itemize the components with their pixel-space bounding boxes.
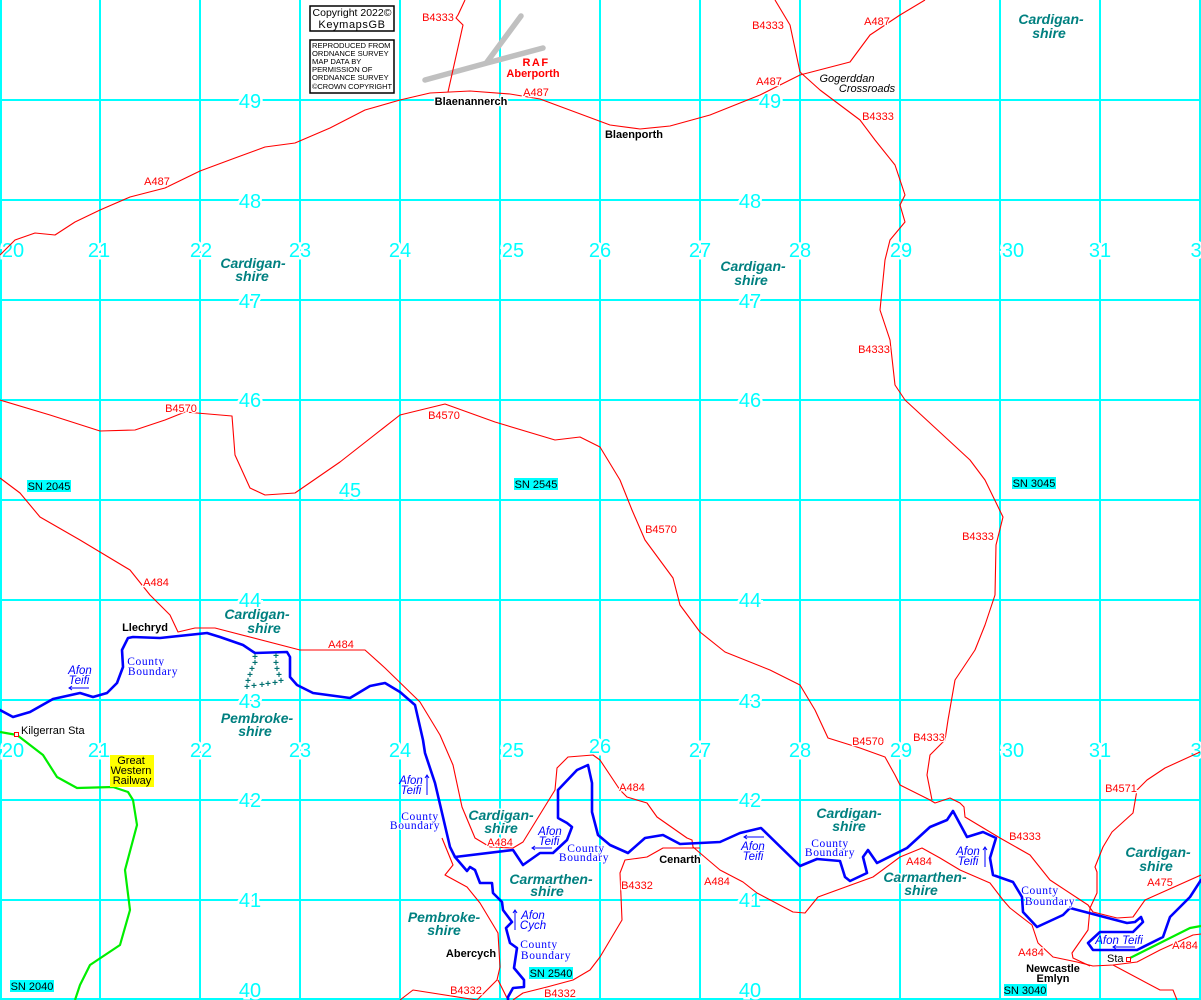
grid numbers: 20 (2, 740, 24, 762)
county names: shire (238, 723, 272, 739)
road labels: A484 (619, 782, 645, 794)
grid numbers: 42 (739, 790, 761, 812)
grid numbers: 21 (88, 240, 110, 262)
county names: shire (235, 268, 269, 284)
county boundary river (0, 633, 1201, 1000)
plantation crosses: + (247, 671, 253, 682)
road labels: B4332 (621, 880, 653, 892)
grid numbers: 29 (890, 740, 912, 762)
river labels: Cych (520, 920, 546, 932)
reproduction notice box: ©CROWN COPYRIGHT (312, 82, 392, 91)
river labels: Afon (740, 841, 765, 853)
reproduction notice box: ORDNANCE SURVEY (312, 49, 389, 58)
road labels: B4333 (752, 20, 784, 32)
county boundary labels: County (811, 838, 849, 850)
road labels: A484 (1018, 947, 1044, 959)
grid numbers: 29 (890, 240, 912, 262)
settlement labels: Blaenannerch (435, 96, 508, 108)
plantation crosses: + (249, 665, 255, 676)
grid reference labels: SN 2040 (11, 981, 53, 993)
railway label (110, 755, 154, 787)
copyright box: KeymapsGB (318, 19, 386, 31)
grid numbers: 22 (190, 240, 212, 262)
county names: shire (1032, 25, 1066, 41)
river labels: Afon (520, 910, 545, 922)
grid numbers: 44 (739, 590, 761, 612)
plantation crosses: + (276, 671, 282, 682)
grid numbers: 43 (239, 691, 261, 713)
plantation crosses: + (265, 680, 271, 691)
reproduction notice box: ORDNANCE SURVEY (312, 73, 389, 82)
grid numbers: 49 (239, 91, 261, 113)
road labels: B4332 (544, 988, 576, 1000)
grid numbers: 30 (1002, 240, 1024, 262)
grid numbers: 45 (339, 480, 361, 502)
reproduction notice box: MAP DATA BY (312, 57, 361, 66)
grid reference labels: SN 2540 (530, 968, 572, 980)
county boundary labels: County (127, 656, 165, 668)
RAF Aberporth label: Aberporth (506, 68, 560, 80)
grid numbers: 49 (759, 91, 781, 113)
grid numbers: 48 (239, 191, 261, 213)
county names: Pembroke- (408, 909, 481, 925)
county names: Pembroke- (221, 710, 294, 726)
grid numbers: 27 (689, 740, 711, 762)
river labels: Teifi (958, 856, 979, 868)
county names: Cardigan- (220, 255, 286, 271)
settlement labels: Cenarth (659, 854, 701, 866)
railway label: Railway (113, 775, 152, 787)
road labels: B4570 (645, 524, 677, 536)
county names: shire (904, 882, 938, 898)
grid numbers: 26 (589, 240, 611, 262)
grid numbers: 42 (239, 790, 261, 812)
grid numbers: 47 (239, 291, 261, 313)
road labels: A484 (143, 577, 169, 589)
county names: Carmarthen- (883, 869, 967, 885)
reproduction notice box (310, 40, 394, 93)
road labels: B4333 (962, 531, 994, 543)
plantation crosses: + (245, 677, 251, 688)
county names: Cardigan- (224, 606, 290, 622)
crossroads label: Crossroads (839, 83, 896, 95)
grid numbers: 27 (689, 240, 711, 262)
plantation crosses: + (272, 679, 278, 690)
crossroads label (819, 73, 896, 95)
settlement labels (122, 96, 1080, 985)
river labels: Afon (955, 846, 980, 858)
road labels: A487 (523, 87, 549, 99)
grid numbers: 21 (88, 740, 110, 762)
road labels: A487 (144, 176, 170, 188)
grid numbers: 30 (1002, 740, 1024, 762)
settlement labels: Emlyn (1036, 973, 1070, 985)
county names: Cardigan- (1125, 844, 1191, 860)
copyright box (310, 6, 394, 31)
road labels: B4570 (165, 403, 197, 415)
county names: Cardigan- (816, 805, 882, 821)
plantation crosses (244, 652, 284, 694)
grid numbers: 43 (739, 691, 761, 713)
RAF Aberporth label: RAF (522, 57, 550, 69)
river labels: Teifi (69, 675, 90, 687)
road labels: A487 (864, 16, 890, 28)
grid numbers: 47 (739, 291, 761, 313)
county names (220, 11, 1191, 938)
road labels: A484 (487, 837, 513, 849)
river labels: Afon (67, 665, 92, 677)
grid numbers: 31 (1089, 740, 1111, 762)
settlement labels: Newcastle (1026, 963, 1080, 975)
river labels (67, 665, 1143, 949)
road labels: B4333 (913, 732, 945, 744)
county boundary labels: Boundary (128, 666, 178, 678)
road labels: A484 (704, 876, 730, 888)
plantation crosses: + (244, 683, 250, 694)
grid numbers: 31 (1089, 240, 1111, 262)
county names: shire (734, 272, 768, 288)
grid reference labels: SN 2545 (515, 479, 557, 491)
station: Kilgerran: Kilgerran Sta (21, 725, 85, 737)
grid numbers: 46 (739, 390, 761, 412)
station: Newcastle Emlyn: Sta (1107, 953, 1124, 965)
grid numbers: 20 (2, 240, 24, 262)
plantation crosses: + (251, 682, 257, 693)
settlement labels: Abercych (446, 948, 496, 960)
county boundary labels: Boundary (1025, 896, 1075, 908)
railway label: Great (117, 755, 145, 767)
plantation crosses: + (273, 659, 279, 670)
plantation crosses: + (273, 652, 279, 663)
grid numbers: 46 (239, 390, 261, 412)
county names: shire (247, 620, 281, 636)
county names: shire (427, 922, 461, 938)
county boundary labels: County (567, 843, 605, 855)
county boundary labels: Boundary (390, 820, 440, 832)
county names: shire (1139, 858, 1173, 874)
grid numbers: 22 (190, 740, 212, 762)
railway (0, 732, 1201, 1000)
plantation crosses: + (252, 653, 258, 664)
road labels: B4333 (858, 344, 890, 356)
road labels: A484 (1172, 940, 1198, 952)
copyright box: Copyright 2022© (313, 7, 392, 19)
settlement labels: Llechryd (122, 622, 168, 634)
grid numbers: 28 (789, 240, 811, 262)
grid numbers: 26 (589, 736, 611, 758)
river labels: Teifi (743, 851, 764, 863)
river labels: Teifi (539, 836, 560, 848)
road labels: B4570 (852, 736, 884, 748)
grid numbers: 23 (289, 740, 311, 762)
road labels: A487 (756, 76, 782, 88)
grid numbers: 25 (502, 240, 524, 262)
county names: Carmarthen- (509, 871, 593, 887)
grid numbers: 28 (789, 740, 811, 762)
county names: Cardigan- (468, 807, 534, 823)
grid reference labels: SN 3045 (1013, 478, 1055, 490)
county names: Cardigan- (1018, 11, 1084, 27)
county boundary labels: County (520, 939, 558, 951)
county boundary labels: Boundary (521, 950, 571, 962)
reproduction notice box: PERMISSION OF (312, 65, 373, 74)
grid reference labels: SN 3040 (1004, 985, 1046, 997)
county names: shire (832, 818, 866, 834)
county boundary labels: Boundary (559, 852, 609, 864)
settlement labels: Blaenporth (605, 129, 663, 141)
road labels: B4571 (1105, 783, 1137, 795)
county names: shire (484, 820, 518, 836)
grid numbers: 44 (239, 590, 261, 612)
road labels: B4570 (428, 410, 460, 422)
grid numbers: 48 (739, 191, 761, 213)
crossroads label: Gogerddan (819, 73, 875, 85)
grid numbers: 24 (389, 740, 411, 762)
plantation crosses: + (274, 665, 280, 676)
runways: RAF Aberporth (425, 16, 543, 80)
grid reference labels: SN 2045 (28, 481, 70, 493)
river labels: Afon (398, 775, 423, 787)
railway label: Western (111, 765, 151, 777)
river labels: Teifi (401, 785, 422, 797)
road labels: B4332 (450, 985, 482, 997)
county names: shire (530, 883, 564, 899)
road labels: B4333 (862, 111, 894, 123)
county boundary labels: County (401, 811, 439, 823)
grid reference labels (10, 477, 1056, 997)
grid numbers: 41 (739, 890, 761, 912)
road labels: A475 (1147, 877, 1173, 889)
road labels: B4333 (1009, 831, 1041, 843)
grid numbers: 24 (389, 240, 411, 262)
RAF Aberporth label (506, 57, 560, 80)
county boundary labels (127, 656, 1075, 962)
county boundary labels: County (1021, 885, 1059, 897)
grid numbers: 25 (502, 740, 524, 762)
county names: Cardigan- (720, 258, 786, 274)
plantation crosses: + (259, 681, 265, 692)
plantation crosses: + (252, 659, 258, 670)
grid numbers: 23 (289, 240, 311, 262)
river labels: Afon Teifi (1094, 935, 1143, 947)
plantation crosses: + (278, 677, 284, 688)
road labels: A484 (906, 856, 932, 868)
river labels: Afon (537, 826, 562, 838)
road labels: A484 (328, 639, 354, 651)
county boundary labels: Boundary (805, 847, 855, 859)
road labels: B4333 (422, 12, 454, 24)
reproduction notice box: REPRODUCED FROM (312, 41, 390, 50)
grid numbers: 41 (239, 890, 261, 912)
